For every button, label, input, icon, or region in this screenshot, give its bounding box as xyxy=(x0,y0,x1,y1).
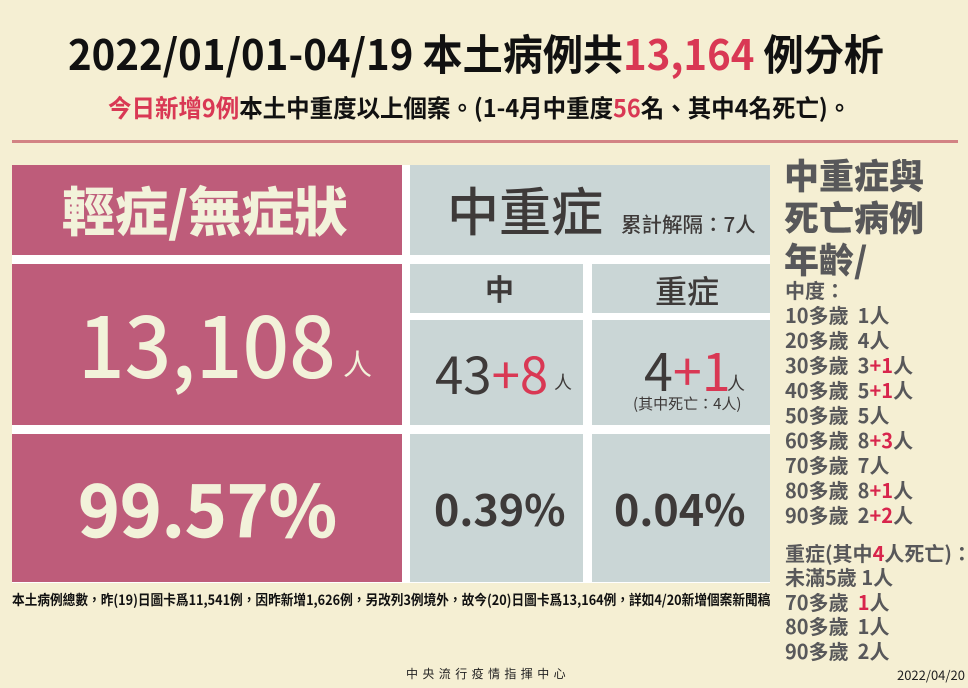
panel heading: age: 中重症與 xyxy=(784,149,924,200)
heading: mild / asymptomatic: 輕症/無症狀 xyxy=(62,171,347,247)
age list: severe xyxy=(785,538,968,665)
panel heading: age: 死亡病例 xyxy=(784,191,924,242)
age 40s: 40多歲 5+1人 xyxy=(785,375,913,404)
age 50s: 50多歲 5人 xyxy=(785,400,889,429)
age 70s: 70多歲 1人 xyxy=(785,587,890,616)
panel: moderate severe header xyxy=(410,165,770,255)
age 30s: 30多歲 3+1人 xyxy=(785,350,913,379)
white table backing xyxy=(12,165,770,583)
panel: moderate label xyxy=(410,264,583,313)
subtitle: 今日新增9例本土中重度以上個案。(1-4月中重度56名、其中4名死亡)。 xyxy=(108,90,851,125)
severe label: 重症(其中4人死亡)： xyxy=(785,538,968,567)
moderate count unit: 人 xyxy=(554,369,572,395)
moderate percent number: 0.39% xyxy=(434,477,566,539)
age 60s: 60多歲 8+3人 xyxy=(785,425,913,454)
mild percent number: 99.57% xyxy=(78,456,337,558)
severe count unit: 人 xyxy=(727,370,745,396)
moderate label: 中度： xyxy=(785,275,845,304)
age 80s: 80多歲 1人 xyxy=(785,611,889,640)
severe percent number: 0.04% xyxy=(614,477,746,539)
moderate count number: 43+8 xyxy=(435,335,548,409)
panel: severe label xyxy=(592,264,770,313)
age 90s: 90多歲 2+2人 xyxy=(785,500,913,529)
panel: mild percent xyxy=(12,434,402,582)
severe deaths note: (其中死亡：4人) xyxy=(633,393,741,414)
age 10s: 10多歲 1人 xyxy=(785,300,889,329)
age 90s: 90多歲 2人 xyxy=(785,636,889,665)
age 70s: 70多歲 7人 xyxy=(785,450,889,479)
title: 2022/01/01-04/19 本土病例共13,164 例分析 xyxy=(68,22,884,83)
panel: mild header xyxy=(12,165,402,255)
panel: moderate count xyxy=(410,320,583,425)
panel heading: age: 年齡/ xyxy=(784,233,867,284)
severe count number: 4+1 xyxy=(644,331,731,406)
mild count number: 13,108 xyxy=(78,282,336,403)
moderate label text: 中 xyxy=(485,267,514,309)
heading: moderate severe: 中重症 xyxy=(447,171,603,246)
age 80s: 80多歲 8+1人 xyxy=(785,475,913,504)
panel heading: age xyxy=(784,149,924,284)
panel: severe percent xyxy=(592,434,770,582)
footnote: 本土病例總數，昨(19)日圖卡爲11,541例，因昨新增1,626例，另改列3例境外，故今(20)日圖卡爲13,164例，詳如4/20新增個案新聞稿 xyxy=(12,590,770,610)
panel: severe count xyxy=(592,320,770,425)
mild count unit: 人 xyxy=(343,342,372,384)
divider line xyxy=(12,140,958,143)
age 20s: 20多歲 4人 xyxy=(785,325,889,354)
panel: moderate percent xyxy=(410,434,583,582)
panel: mild count xyxy=(12,264,402,425)
source: command center: 中央流行疫情指揮中心 xyxy=(406,665,570,682)
under 5: 未滿5歲 1人 xyxy=(785,562,893,591)
age list: moderate xyxy=(785,275,913,529)
severe label text: 重症 xyxy=(655,267,719,313)
released count: 累計解隔：7人 xyxy=(621,208,756,238)
date: 2022/04/20 xyxy=(897,665,965,684)
